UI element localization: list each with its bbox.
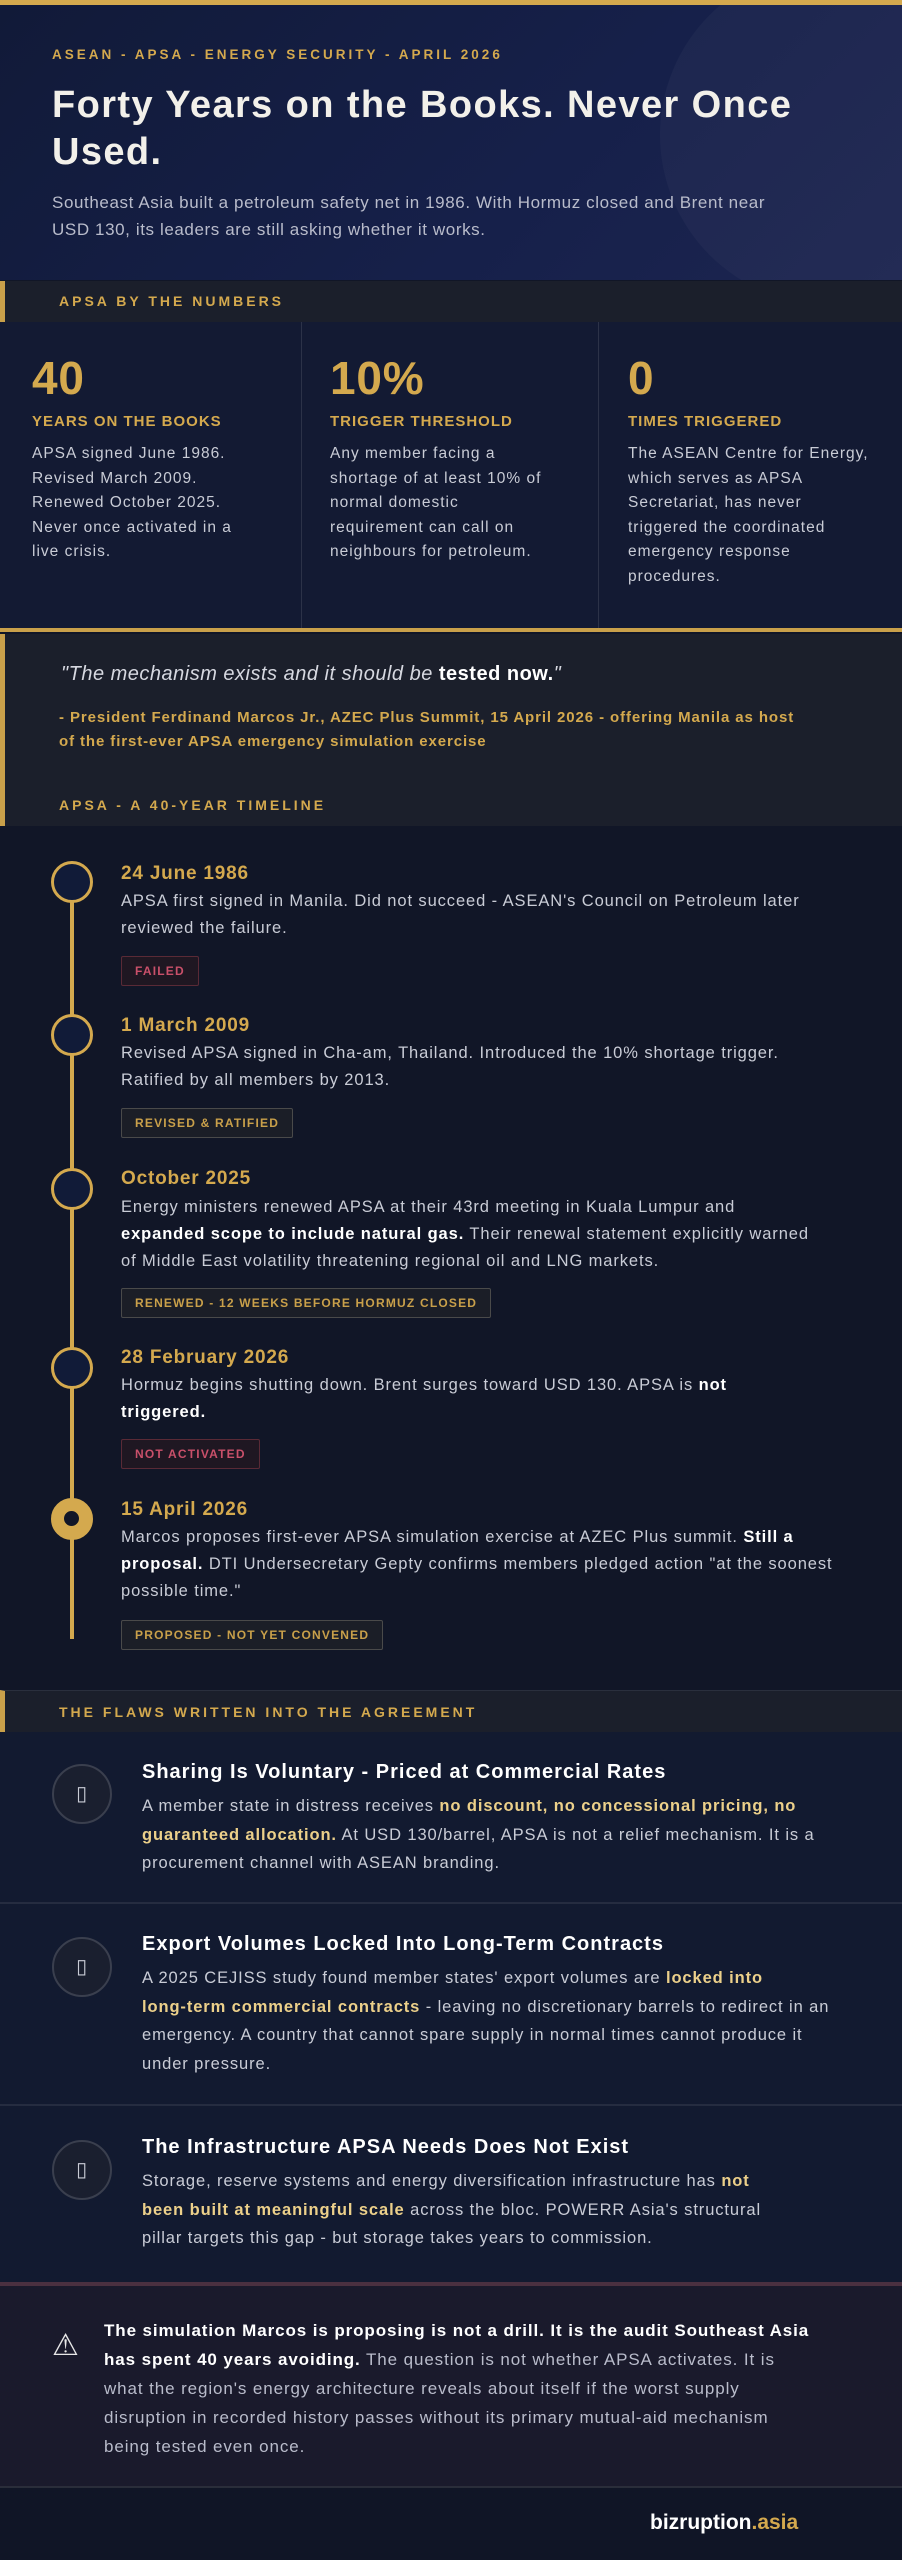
section header: flaws: THE FLAWS WRITTEN INTO THE AGREEMENT xyxy=(59,1704,477,1720)
flaw 2: Export Volumes Locked Into Long-Term Contracts xyxy=(142,1933,664,1955)
stat: 40: YEARS ON THE BOOKS xyxy=(32,413,222,430)
section header: flaws xyxy=(0,1690,902,1732)
event Oct 2025: Energy ministers renewed APSA at their 43rd meeting in Kuala Lumpur and expanded scope to include natural gas. Their renewal statement explicitly warned of Middle East volatility threatening regional oil and LNG markets. xyxy=(121,1198,809,1270)
flaw 1: A member state in distress receives no discount, no concessional pricing, no guaranteed allocation. At USD 130/barrel, APSA is not a relief mechanism. It is a procurement channel with ASEAN branding. xyxy=(142,1797,815,1872)
brand: bizruption.asia xyxy=(650,2511,798,2534)
title: Forty Years on the Books. Never Once Used. xyxy=(52,84,792,173)
stat: 0: TIMES TRIGGERED xyxy=(628,413,782,430)
quote panel + timeline header: APSA - A 40-YEAR TIMELINE xyxy=(59,797,326,813)
kicker: ASEAN - APSA - ENERGY SECURITY - APRIL 2026 xyxy=(52,47,503,62)
flaws panel xyxy=(0,1732,902,2282)
event 2009: REVISED & RATIFIED xyxy=(135,1116,279,1130)
stat: 10% xyxy=(330,352,541,560)
flaw 1: ▯ xyxy=(76,1783,88,1805)
section header: numbers xyxy=(0,281,902,322)
stat: 10%: 10% xyxy=(330,352,424,404)
stat: 0: The ASEAN Centre for Energy, which serves as APSA Secretariat, has never triggered the coordinated emergency response procedures. xyxy=(628,445,869,585)
flaw 3: ▯ xyxy=(76,2159,88,2181)
event Apr 2026: PROPOSED - NOT YET CONVENED xyxy=(135,1628,369,1642)
stat: 0: 0 xyxy=(628,352,654,404)
event Oct 2025: October 2025 xyxy=(121,1168,251,1189)
event Feb 2026: 28 February 2026 xyxy=(121,1347,289,1368)
attribution: - President Ferdinand Marcos Jr., AZEC Plus Summit, 15 April 2026 - offering Manila as host of the first-ever APSA emergency simulation exercise xyxy=(59,709,794,750)
flaw 3: Storage, reserve systems and energy diversification infrastructure has not been built at meaningful scale across the bloc. POWERR Asia's structural pillar targets this gap - but storage takes years to commission. xyxy=(142,2172,761,2247)
event Feb 2026 xyxy=(51,1347,727,1469)
flaw 2 xyxy=(0,1906,902,2106)
stat: 40: APSA signed June 1986. Revised March 2009. Renewed October 2025. Never once activated in a live crisis. xyxy=(32,445,232,560)
stat: 10%: Any member facing a shortage of at least 10% of normal domestic requirement can call on neighbours for petroleum. xyxy=(330,445,541,560)
stat: 0 xyxy=(628,352,869,585)
event Feb 2026: NOT ACTIVATED xyxy=(135,1447,246,1461)
flaw 3 xyxy=(52,2136,761,2247)
header panel xyxy=(0,0,902,280)
footer xyxy=(0,2488,902,2560)
stats panel xyxy=(0,322,902,632)
section header: numbers: APSA BY THE NUMBERS xyxy=(59,293,284,309)
timeline xyxy=(51,861,833,1650)
quote: "The mechanism exists and it should be tested now." xyxy=(61,663,561,685)
event Apr 2026: Marcos proposes first-ever APSA simulation exercise at AZEC Plus summit. Still a proposal. DTI Undersecretary Gepty confirms members pledged action "at the soonest possible time." xyxy=(121,1528,833,1600)
event 2009: 1 March 2009 xyxy=(121,1015,250,1036)
event 2009 xyxy=(51,1014,779,1138)
event 1986: APSA first signed in Manila. Did not succeed - ASEAN's Council on Petroleum later reviewed the failure. xyxy=(121,892,800,937)
callout text: The simulation Marcos is proposing is not a drill. It is the audit Southeast Asia has spent 40 years avoiding. The question is not whether APSA activates. It is what the region's energy architecture reveals about itself if the worst supply disruption in recorded history passes without its primary mutual-aid mechanism being tested even once. xyxy=(104,2321,809,2456)
flaw 2: A 2025 CEJISS study found member states' export volumes are locked into long-term commercial contracts - leaving no discretionary barrels to redirect in an emergency. A country that cannot spare supply in normal times cannot produce it under pressure. xyxy=(142,1969,829,2072)
event Apr 2026: 15 April 2026 xyxy=(121,1499,248,1520)
event Oct 2025: RENEWED - 12 WEEKS BEFORE HORMUZ CLOSED xyxy=(135,1296,477,1310)
flaw 2: ▯ xyxy=(76,1956,88,1978)
stat: 40: 40 xyxy=(32,352,85,404)
event 1986: FAILED xyxy=(135,964,185,978)
event Oct 2025 xyxy=(51,1168,809,1318)
stat: 40 xyxy=(32,352,232,560)
event 1986: 24 June 1986 xyxy=(121,863,249,884)
flaw 3: The Infrastructure APSA Needs Does Not Exist xyxy=(142,2136,629,2158)
callout xyxy=(0,2282,902,2488)
subtitle: Southeast Asia built a petroleum safety net in 1986. With Hormuz closed and Brent near USD 130, its leaders are still asking whether it works. xyxy=(52,193,765,239)
event Apr 2026 xyxy=(51,1498,833,1650)
quote panel + timeline header xyxy=(0,634,902,826)
flaw 1: Sharing Is Voluntary - Priced at Commercial Rates xyxy=(142,1761,666,1783)
event Feb 2026: Hormuz begins shutting down. Brent surges toward USD 130. APSA is not triggered. xyxy=(121,1376,727,1421)
flaw 1 xyxy=(0,1732,902,1904)
event 1986 xyxy=(51,861,800,986)
icon: warning: ⚠ xyxy=(52,2329,80,2362)
event 2009: Revised APSA signed in Cha-am, Thailand. Introduced the 10% shortage trigger. Ratified by all members by 2013. xyxy=(121,1044,779,1089)
stat: 10%: TRIGGER THRESHOLD xyxy=(330,413,513,430)
